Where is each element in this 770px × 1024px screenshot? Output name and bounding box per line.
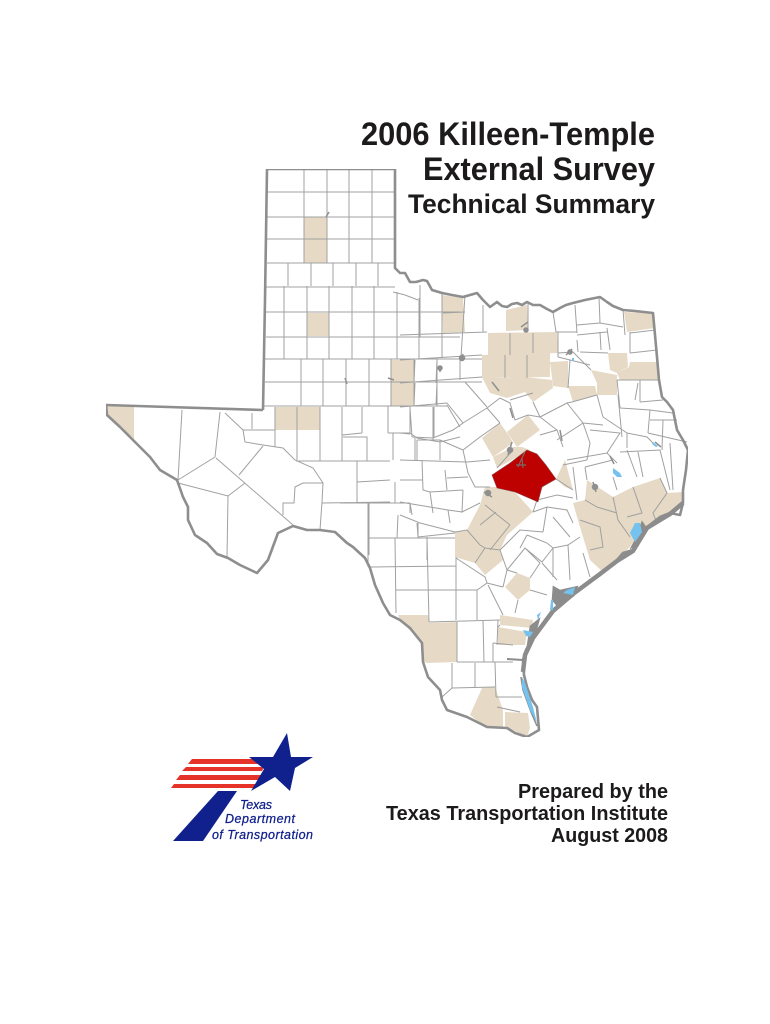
- gulf coast and bays: [507, 503, 683, 726]
- lines through tan counties: [297, 239, 667, 627]
- logo stripes: [171, 759, 264, 788]
- logo wordmark: of Transportation: [212, 828, 313, 842]
- map: Texas counties: [106, 169, 688, 737]
- logo wordmark: [212, 798, 313, 842]
- logo star: [249, 733, 313, 791]
- TxDOT logo: [171, 733, 313, 842]
- subtitle: Technical Summary: [408, 189, 655, 219]
- title: [361, 116, 655, 219]
- south texas: [340, 482, 590, 712]
- state fill: [106, 169, 688, 737]
- date line: August 2008: [551, 825, 668, 847]
- highlighted Killeen-Temple county (red): [492, 450, 556, 502]
- institute line: Texas Transportation Institute: [386, 803, 668, 825]
- logo wordmark: Department: [225, 812, 296, 826]
- state outline: [106, 169, 688, 737]
- water bodies (blue): [522, 358, 658, 723]
- surveyed counties (tan): [106, 217, 683, 737]
- logo wordmark: Texas: [240, 798, 272, 812]
- north and central: [400, 285, 687, 500]
- title line 1: 2006 Killeen-Temple: [361, 116, 655, 152]
- logo T stem: [173, 791, 237, 841]
- trans-pecos and west: [178, 410, 323, 557]
- county lines: [178, 169, 687, 712]
- panhandle and plains grid: [263, 169, 482, 406]
- prepared line: Prepared by the: [518, 781, 668, 803]
- prepared by block: [386, 781, 668, 847]
- northeast counties: [556, 323, 660, 402]
- title line 2: External Survey: [423, 151, 655, 187]
- reservoirs and rivers (gray): [326, 212, 661, 497]
